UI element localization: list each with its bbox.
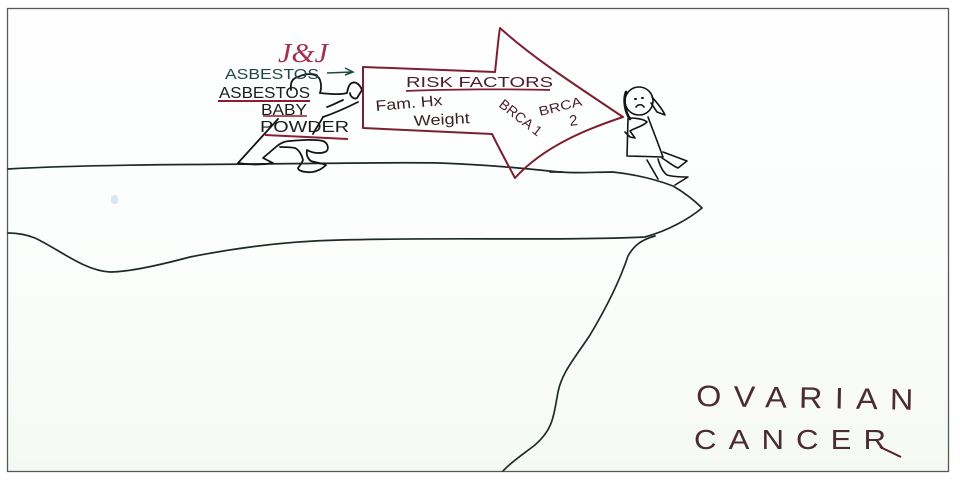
arrow: risk factors: 2 [568,112,579,130]
J&J label: J&J [278,38,330,68]
label: BRCA 2: BRCA [537,94,584,119]
label: family history: Fam. Hx [375,92,444,115]
title: ovarian cancer: OVARIAN [696,379,914,416]
teal arrow [327,68,353,75]
title: ovarian cancer [694,379,914,457]
label: BRCA 1: BRCA 1 [496,96,546,139]
warning label: asbestos baby powder: BABY [261,102,307,119]
warning label: asbestos baby powder: POWDER [260,119,349,136]
teal asbestos label: ASBESTOS [225,66,319,83]
warning label: asbestos baby powder: ASBESTOS [219,85,310,102]
title: ovarian cancer: CANCER [694,425,886,456]
woman at cliff edge [625,87,688,185]
blue smudge [111,195,118,204]
heading: risk factors: RISK FACTORS [406,74,553,91]
warning label: asbestos baby powder [218,85,349,139]
cliff outline [8,163,702,471]
label: weight: Weight [413,110,471,130]
man pushing the arrow [238,74,362,172]
arrow: risk factors [363,28,623,178]
